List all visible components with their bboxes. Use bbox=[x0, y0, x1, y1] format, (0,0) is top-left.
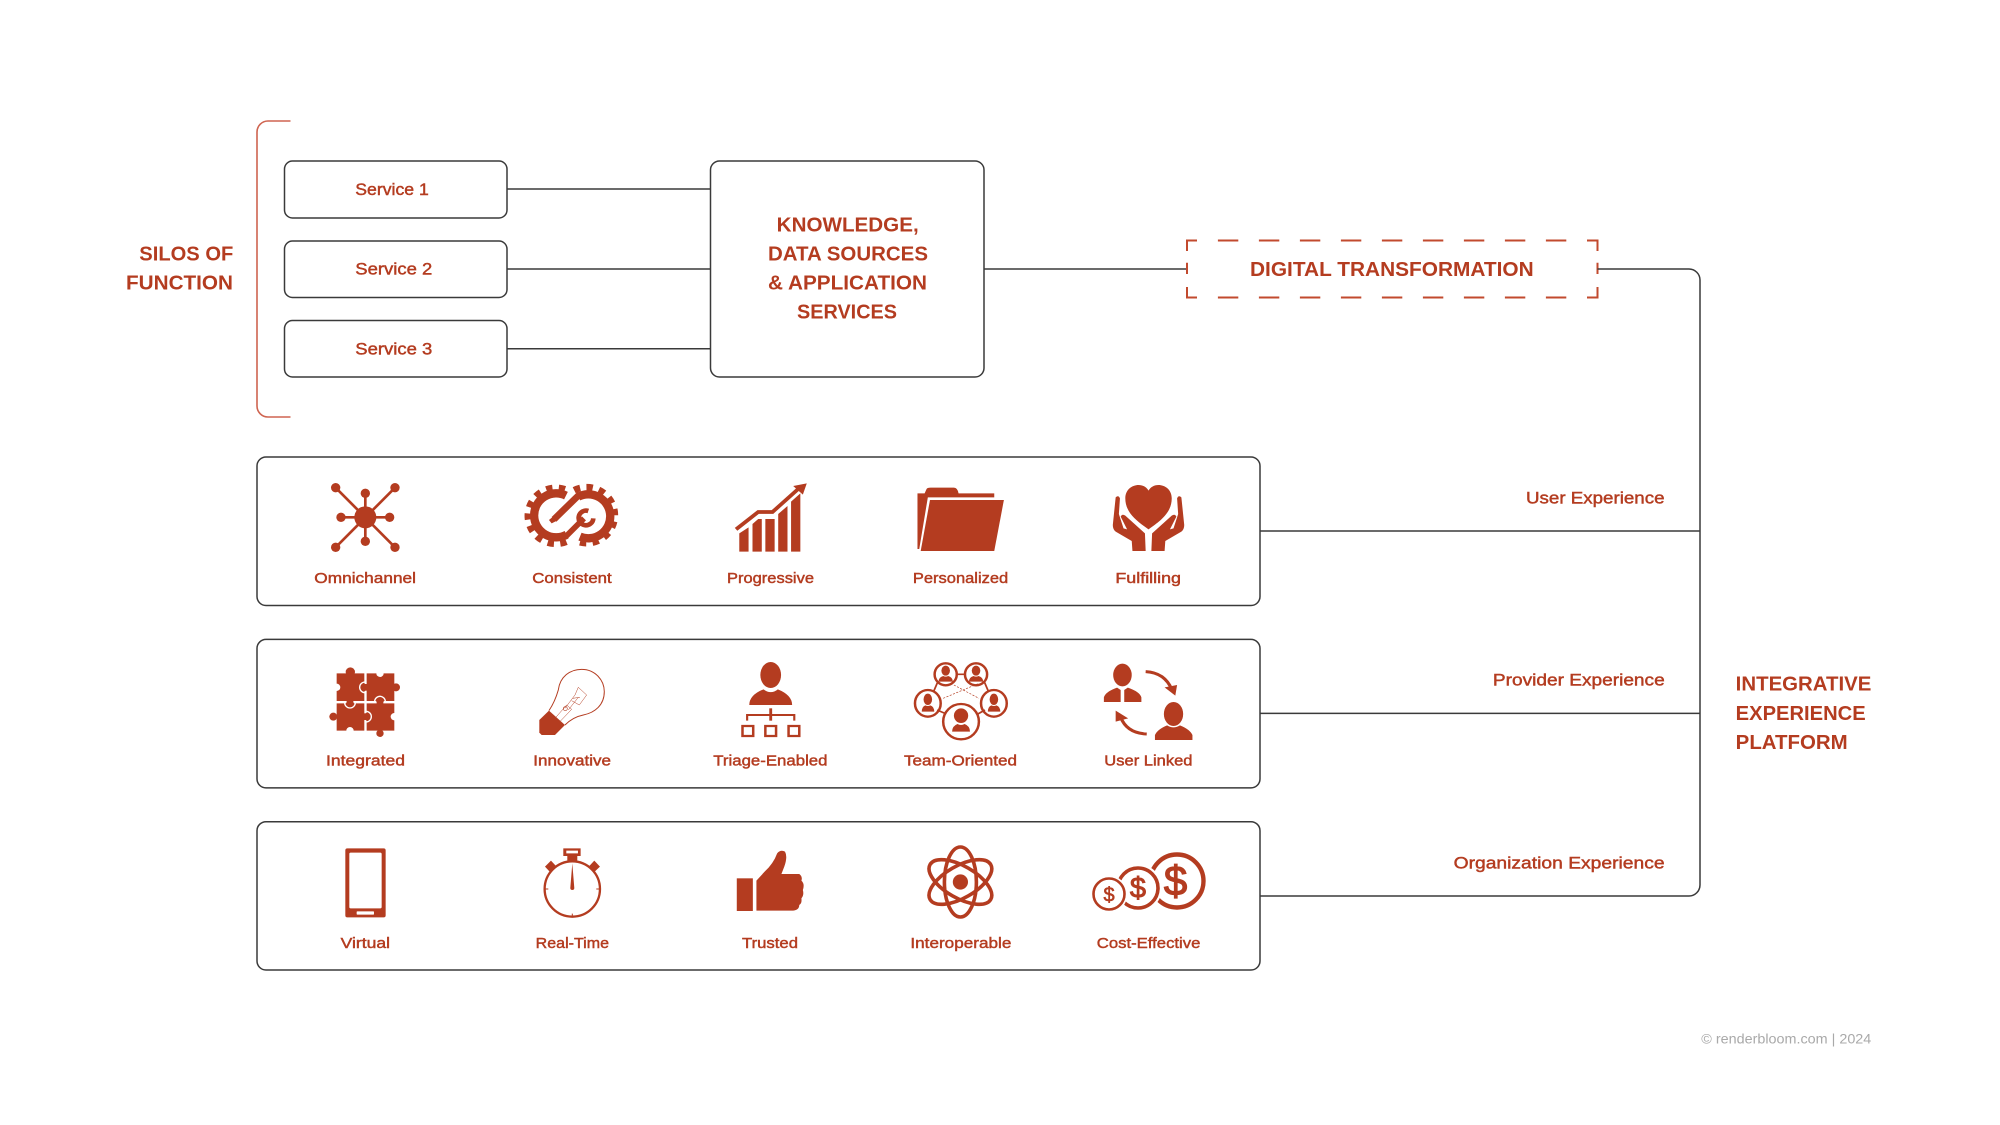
heading: integrative experience platform: PLATFORM bbox=[1736, 732, 1848, 754]
heading: integrative experience platform bbox=[1736, 674, 1871, 754]
text: virtual: Virtual bbox=[341, 935, 390, 952]
text: interoperable: Interoperable bbox=[910, 935, 1011, 952]
heading: silos of function: FUNCTION bbox=[126, 273, 233, 295]
text: omnichannel: Omnichannel bbox=[314, 570, 416, 587]
service 1 box bbox=[284, 161, 507, 218]
icon: integrated puzzle bbox=[329, 667, 400, 737]
icon: personalized folder bbox=[917, 488, 1004, 551]
text: triage-enabled: Triage-Enabled bbox=[713, 752, 828, 769]
icon: progressive bbox=[736, 483, 807, 552]
text: personalized: Personalized bbox=[913, 570, 1008, 587]
text: integrated: Integrated bbox=[326, 752, 405, 769]
bracket: silos bbox=[257, 121, 290, 417]
icon: consistent bbox=[528, 487, 615, 544]
text: consistent: Consistent bbox=[532, 570, 613, 587]
heading: integrative experience platform: INTEGRATIVE bbox=[1736, 674, 1871, 696]
footer credit: © renderbloom.com | 2024 bbox=[1701, 1032, 1872, 1046]
icon: omnichannel bbox=[331, 483, 400, 552]
service 2 box: Service 2 bbox=[355, 260, 432, 279]
text: cost-effective: Cost-Effective bbox=[1097, 935, 1200, 952]
panel: user experience bbox=[257, 457, 1260, 606]
heading: integrative experience platform: EXPERIENCE bbox=[1736, 703, 1866, 725]
icon: cost-effective coins bbox=[1090, 854, 1204, 912]
icon: real-time stopwatch bbox=[545, 848, 600, 917]
icon: team-oriented bbox=[915, 663, 1007, 739]
service 2 box bbox=[284, 241, 507, 298]
icon: cost-effective coins: $ bbox=[1130, 872, 1146, 904]
icon: virtual phone bbox=[345, 848, 386, 917]
text: team-oriented: Team-Oriented bbox=[904, 752, 1017, 769]
panel: organization experience bbox=[257, 822, 1260, 970]
service 3 box bbox=[284, 320, 507, 377]
text: fulfilling: Fulfilling bbox=[1115, 570, 1181, 587]
text: trusted: Trusted bbox=[742, 935, 798, 952]
knowledge box: & APPLICATION bbox=[768, 272, 927, 294]
service 3 box: Service 3 bbox=[355, 339, 432, 358]
service 1 box: Service 1 bbox=[355, 180, 429, 199]
text: user linked: User Linked bbox=[1104, 752, 1192, 769]
connectors: services to knowledge bbox=[507, 189, 1187, 349]
label: organization experience: Organization Experience bbox=[1454, 853, 1665, 872]
knowledge box: KNOWLEDGE, bbox=[777, 215, 919, 237]
icon: triage-enabled bbox=[742, 662, 799, 736]
text: progressive: Progressive bbox=[727, 570, 814, 587]
panel: provider experience bbox=[257, 639, 1260, 788]
icon: user linked bbox=[1104, 664, 1192, 740]
heading: silos of function: SILOS OF bbox=[139, 244, 233, 266]
knowledge box: SERVICES bbox=[797, 301, 897, 323]
label: provider experience: Provider Experience bbox=[1493, 671, 1665, 690]
icon: interoperable atom bbox=[922, 847, 999, 917]
icon: cost-effective coins: $ bbox=[1103, 884, 1115, 906]
label: user experience: User Experience bbox=[1526, 488, 1664, 507]
text: real-time: Real-Time bbox=[536, 935, 609, 952]
icon: innovative light bulb bbox=[539, 669, 604, 735]
heading: silos of function bbox=[126, 244, 233, 295]
icon: cost-effective coins: $ bbox=[1164, 857, 1187, 904]
platform connector bbox=[1260, 269, 1700, 896]
digital transformation dashed box bbox=[1187, 240, 1598, 298]
text: innovative: Innovative bbox=[533, 752, 611, 769]
knowledge box: DATA SOURCES bbox=[768, 243, 928, 265]
icon: trusted thumbs up bbox=[737, 851, 804, 911]
digital transformation dashed box: DIGITAL TRANSFORMATION bbox=[1250, 259, 1534, 281]
knowledge box bbox=[710, 161, 984, 377]
icon: fulfilling heart in hands bbox=[1113, 485, 1184, 551]
